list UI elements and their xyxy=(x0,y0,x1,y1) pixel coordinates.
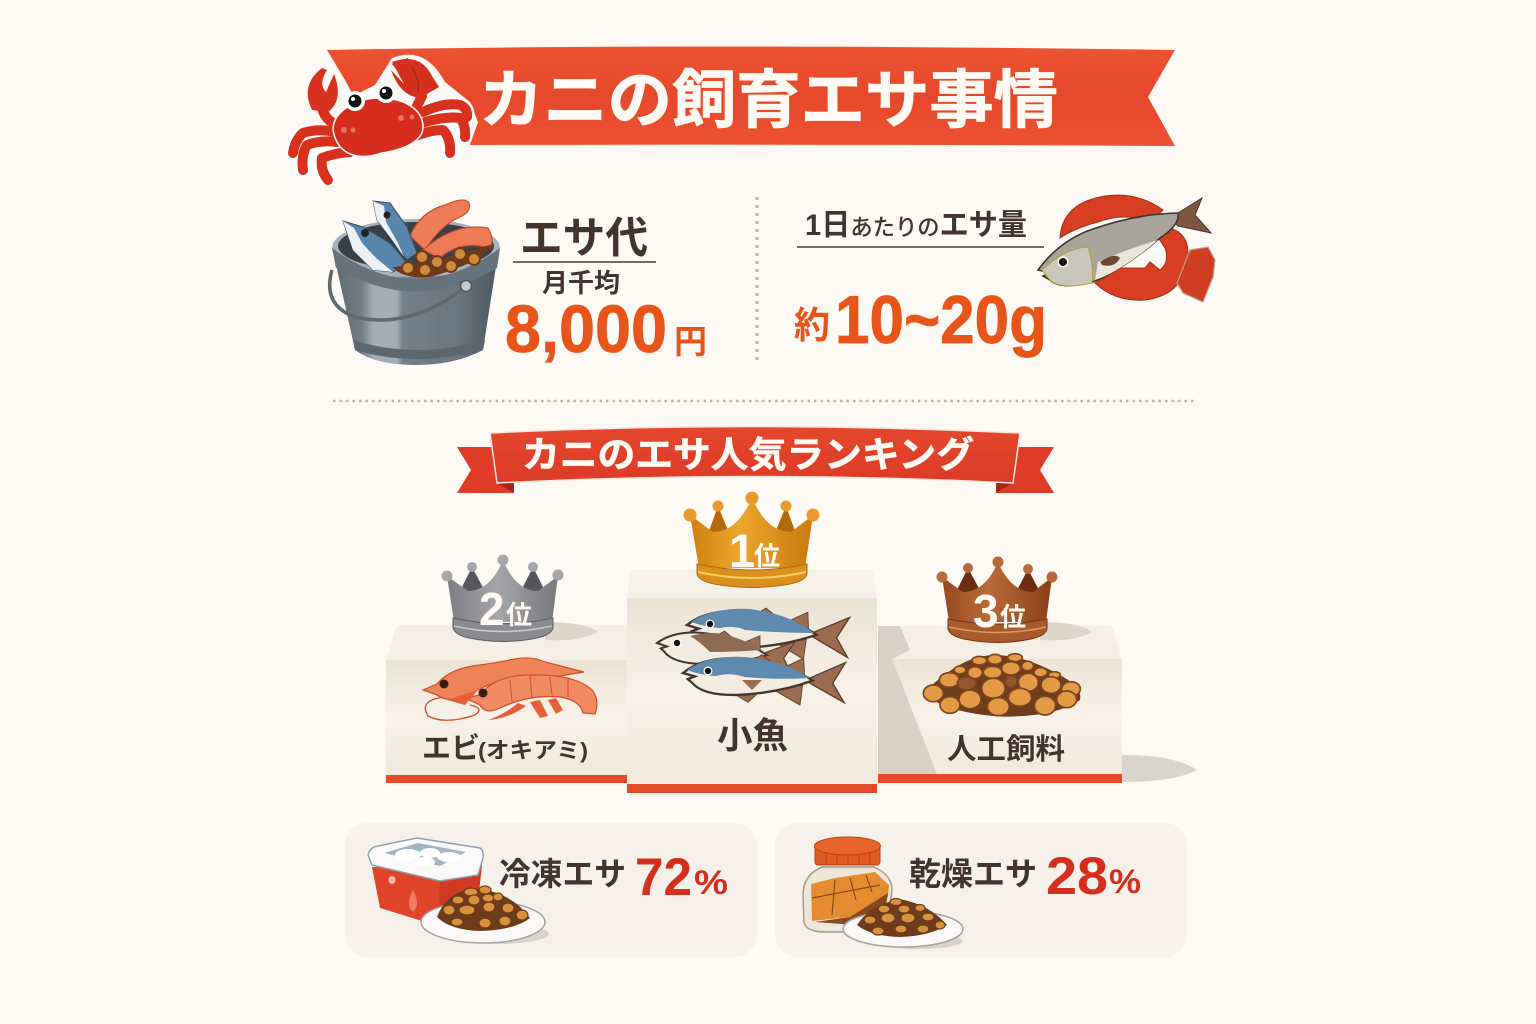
back shrimp xyxy=(423,658,584,699)
crown: 3rd: 位 xyxy=(1000,602,1026,632)
value: 72%: 72 xyxy=(635,848,692,907)
label: monthly average: 月千均 xyxy=(542,268,620,298)
icon: plate of feed xyxy=(843,898,963,949)
icon: crab xyxy=(293,55,478,180)
panel: dried feed: % xyxy=(1109,863,1141,901)
crown: 3rd: 3 xyxy=(973,585,999,637)
ground shadow xyxy=(1122,755,1197,782)
ranking title text: カニのエサ人気ランキング xyxy=(522,434,974,475)
icon: plate of feed xyxy=(421,886,549,944)
antennae xyxy=(425,697,479,720)
icon: shrimp xyxy=(423,658,597,720)
bucket handle xyxy=(330,270,465,320)
title text: カニの飼育エサ事情 xyxy=(479,66,1058,136)
value: 8,000 yen: 8,000 xyxy=(505,292,667,367)
crown: 3rd xyxy=(936,556,1058,642)
label: small fish: 小魚 xyxy=(717,715,788,756)
label: dried feed: 乾燥エサ xyxy=(909,856,1037,892)
front shrimp xyxy=(465,675,597,714)
crown: 1st: 1 xyxy=(729,524,755,577)
crab white outline xyxy=(345,55,478,158)
ranking banner xyxy=(457,426,1054,493)
feed cost stat xyxy=(505,215,707,367)
pellets in bucket xyxy=(395,246,490,276)
panel: frozen feed xyxy=(345,823,757,957)
crown: 1st: 位 xyxy=(754,541,780,571)
icon: jar xyxy=(803,837,892,932)
podium: 1st place xyxy=(627,570,877,793)
value: 28%: 28 xyxy=(1046,847,1108,906)
fish in bucket xyxy=(343,201,417,272)
podium xyxy=(386,570,1197,793)
crown shadows xyxy=(545,622,598,640)
icon: pellet pile xyxy=(923,654,1080,717)
value: 10-20g: 約 xyxy=(794,305,830,346)
label: artificial feed: 人工飼料 xyxy=(947,733,1065,766)
panel: frozen feed: % xyxy=(694,864,728,902)
podium: 3rd place xyxy=(878,626,1122,783)
daily feed amount stat xyxy=(794,209,1047,358)
crown: 1st xyxy=(684,492,820,588)
podium: 2nd place xyxy=(386,625,628,783)
daily feed amount stat: 10~20g xyxy=(835,282,1047,358)
heading: feed cost: エサ代 xyxy=(520,215,648,263)
divider horizontal xyxy=(333,400,1196,402)
label: shrimp: (オキアミ) xyxy=(478,738,588,763)
icon: bucket of feed xyxy=(330,200,500,365)
shrimp in bucket xyxy=(410,200,492,258)
label: shrimp: エビ xyxy=(422,732,480,765)
divider vertical xyxy=(756,197,758,362)
icon: small fish xyxy=(655,604,850,707)
crown: 2nd: 2 xyxy=(479,583,505,635)
feed cost stat: 円 xyxy=(674,323,707,360)
crown: 2nd: 位 xyxy=(506,600,532,630)
icon: fish and crab claw xyxy=(1038,195,1215,302)
crown: 2nd xyxy=(442,554,564,642)
title banner xyxy=(327,46,1175,146)
panel: dried feed xyxy=(775,823,1187,957)
icon: frozen container xyxy=(368,838,483,921)
label: frozen feed: 冷凍エサ xyxy=(499,856,626,892)
heading: daily amount: 1日あたりのエサ量 xyxy=(805,209,1027,242)
